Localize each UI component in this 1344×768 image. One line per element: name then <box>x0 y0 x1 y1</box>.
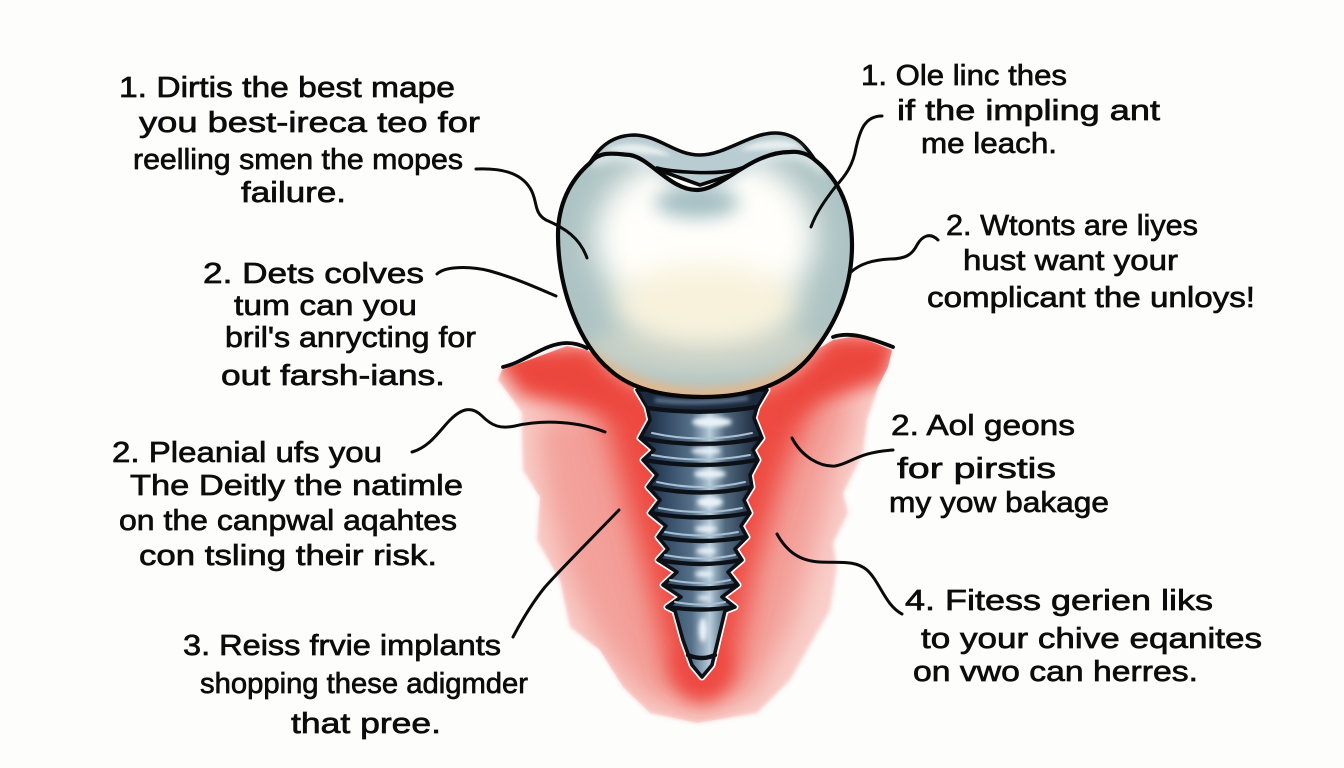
leader: right 4 <box>777 534 902 614</box>
text block: left 4: shopping these adigmder <box>200 668 528 700</box>
text block: left 2: bril's anrycting for <box>225 322 476 354</box>
text block: right 4: on vwo can herres. <box>913 656 1198 688</box>
leader: right 1 <box>811 116 882 227</box>
screw body <box>637 390 767 677</box>
text block: left 2 <box>203 258 476 392</box>
text block: left 1: 1. Dirtis the best mape <box>119 72 455 104</box>
leader: left 1 <box>476 169 587 258</box>
leader: left 3 <box>412 410 605 452</box>
text block: left 3: on the canpwal aqahtes <box>119 505 457 537</box>
text block: left 3: con tsling their risk. <box>139 540 437 572</box>
metal shine <box>691 417 732 642</box>
crown shading <box>560 154 850 395</box>
text block: right 1: me leach. <box>921 128 1057 160</box>
text block: left 2: out farsh-ians. <box>221 360 445 392</box>
gum tissue <box>490 335 900 723</box>
thread lines <box>641 407 761 658</box>
leader: left 2 <box>437 268 556 296</box>
text block: left 4: 3. Reiss frvie implants <box>183 630 501 662</box>
text block: right 1 <box>861 60 1160 160</box>
text block: right 2 <box>927 210 1255 314</box>
text block: left 2: tum can you <box>234 290 417 322</box>
leader: right 3 <box>792 438 893 466</box>
leader lines <box>412 116 938 637</box>
text block: right 2: complicant the unloys! <box>927 282 1255 314</box>
leader: right 2 <box>851 236 938 272</box>
text block: right 1: 1. Ole linc thes <box>861 60 1067 92</box>
text block: right 1: if the impling ant <box>897 95 1160 127</box>
leader: left 4 <box>513 510 619 637</box>
text block: right 3: for pirstis <box>897 453 1056 485</box>
crown outline <box>558 152 852 397</box>
text block: left 4 <box>183 630 528 740</box>
text block: right 4: to your chive eqanites <box>921 623 1262 655</box>
text block: right 4: 4. Fitess gerien liks <box>905 585 1213 617</box>
text block: left 4: that pree. <box>291 708 441 740</box>
gum line right <box>833 335 893 347</box>
text block: right 3: my yow bakage <box>889 487 1109 519</box>
text block: left 1: failure. <box>241 177 346 209</box>
text block: left 3: The Deitly the natimle <box>130 470 463 502</box>
thread highlights <box>652 433 752 604</box>
back cusp <box>590 133 815 185</box>
gum line left <box>503 343 587 367</box>
text block: left 1: reelling smen the mopes <box>133 144 463 176</box>
text block: right 2: 2. Wtonts are liyes <box>946 210 1198 242</box>
text block: right 2: hust want your <box>963 245 1178 277</box>
text block: left 2: 2. Dets colves <box>203 258 424 290</box>
text block: left 1 <box>119 72 480 209</box>
implant screw <box>637 390 767 677</box>
text block: right 3 <box>889 410 1109 519</box>
text block: right 3: 2. Aol geons <box>891 410 1075 442</box>
text block: right 4 <box>905 585 1262 688</box>
text block: left 3: 2. Pleanial ufs you <box>112 437 382 469</box>
text block: left 3 <box>112 437 463 572</box>
collar band <box>640 392 764 410</box>
text block: left 1: you best-ireca teo for <box>139 107 480 139</box>
tooth crown <box>556 131 854 400</box>
groove line <box>657 168 742 173</box>
